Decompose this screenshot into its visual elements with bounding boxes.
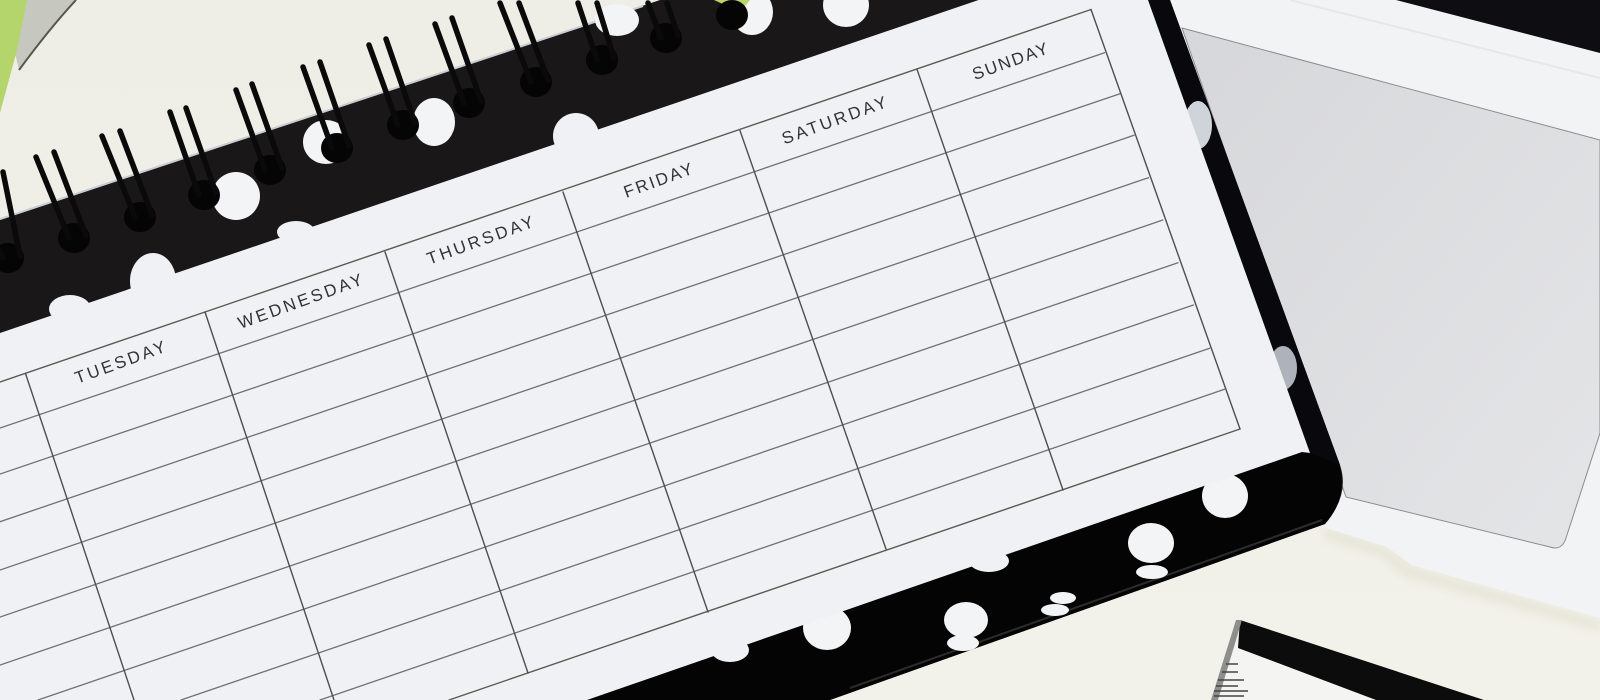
grey tray panel (1182, 28, 1600, 548)
cover lower dark area (560, 440, 1342, 700)
notebook black band (1238, 620, 1484, 700)
plant pot (12, 0, 76, 70)
tray crease (1290, 0, 1600, 78)
notebook scribbles (1214, 664, 1248, 696)
outer top and bottom lines (0, 10, 1240, 700)
white tray frame (1160, 0, 1600, 618)
column lines (26, 10, 1240, 700)
label: Sunday: SUNDAY (970, 39, 1051, 84)
small notebook at bottom (1211, 620, 1484, 700)
label: Tuesday: TUESDAY (72, 337, 168, 388)
label: Thursday: THURSDAY (424, 212, 536, 269)
notebook page (1212, 645, 1376, 700)
polka dots (212, 0, 1297, 651)
pot rim line (19, 0, 76, 70)
spiral wires (0, 3, 678, 258)
label: Saturday: SATURDAY (779, 93, 889, 148)
green leaf (0, 0, 27, 113)
tray shadow (1325, 526, 1600, 632)
cover right stripe (1148, 0, 1340, 465)
spiral holes (0, 0, 748, 273)
page edge above cover (0, 6, 643, 219)
weekly grid (0, 10, 1240, 700)
cover edge stripe (850, 520, 1322, 688)
spiral binding (0, 0, 748, 273)
sheet tabs (49, 113, 1009, 662)
label: Friday: FRIDAY (621, 159, 695, 202)
notebook spine (1211, 620, 1242, 700)
green leaf tip behind spiral (714, 0, 750, 6)
dark item at top right (1396, 0, 1600, 53)
row lines (0, 53, 1224, 700)
label: Wednesday: WEDNESDAY (235, 270, 365, 333)
